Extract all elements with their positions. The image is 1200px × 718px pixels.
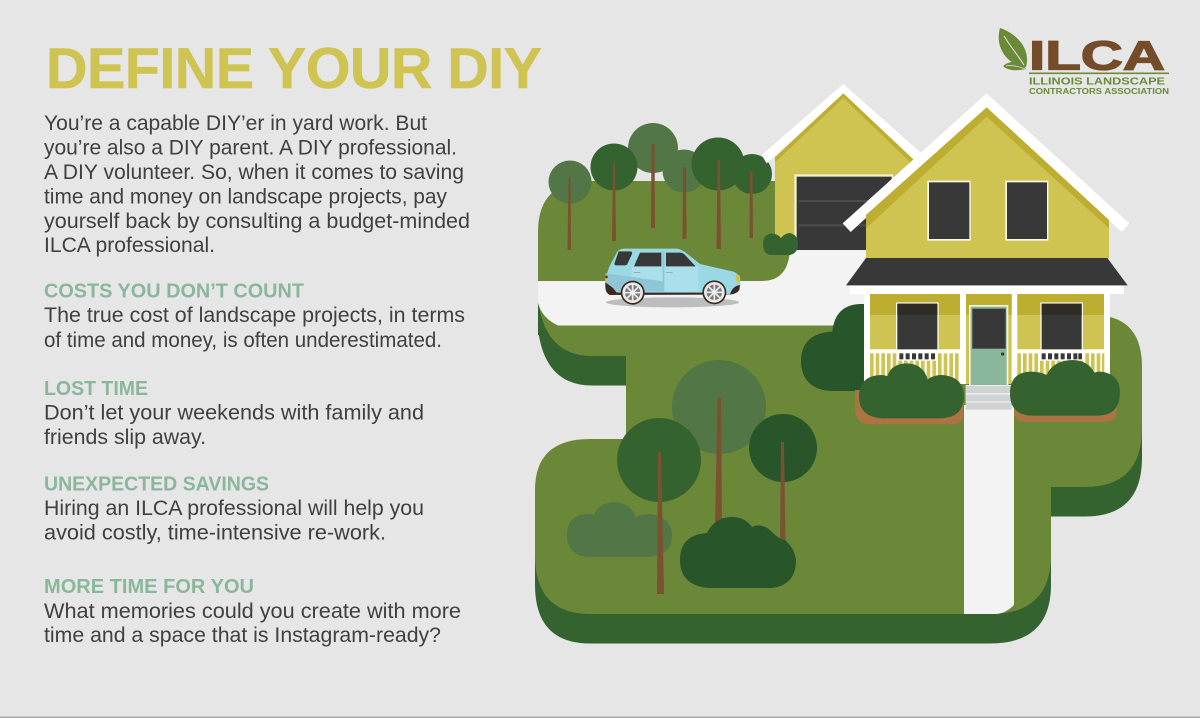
section: unexpected savings: Hiring an ILCA professional will help you (44, 497, 424, 520)
garage door (794, 174, 893, 250)
logo: ILCA: ILLINOIS LANDSCAPE (1029, 76, 1165, 88)
section: costs you don't count: The true cost of landscape projects, in terms (44, 304, 465, 327)
door (969, 305, 1008, 385)
back trees (548, 123, 772, 250)
planter left (855, 390, 963, 424)
upper storey (866, 107, 1109, 258)
lawn shadow (535, 300, 1142, 644)
section: unexpected savings: UNEXPECTED SAVINGS (44, 472, 269, 496)
intro paragraph: A DIY volunteer. So, when it comes to saving (44, 161, 464, 184)
section: lost time: Don’t let your weekends with family and (44, 402, 424, 424)
section: more time for you: MORE TIME FOR YOU (44, 575, 254, 598)
intro paragraph: time and money on landscape projects, pay (44, 186, 447, 208)
wheels (621, 280, 726, 305)
section: more time for you: time and a space that is Instagram-ready? (44, 624, 441, 647)
dark shrub behind porch (801, 304, 864, 391)
intro paragraph: ILCA professional. (44, 234, 215, 257)
steps (966, 385, 1012, 410)
section: lost time (44, 377, 424, 449)
section: lost time: friends slip away. (44, 426, 206, 449)
upper windows (927, 181, 971, 241)
section: costs you don't count: of time and money, is often underestimated. (44, 329, 442, 352)
main lawn (535, 300, 1142, 614)
illustration: yard and house (535, 84, 1142, 644)
intro paragraph: you’re also a DIY parent. A DIY professional. (44, 136, 457, 160)
logo: ILCA (999, 28, 1169, 96)
logo: ILCA: ILCA (1029, 32, 1165, 78)
section: unexpected savings: avoid costly, time-intensive re-work. (44, 522, 386, 544)
section: costs you don't count (44, 280, 465, 352)
shrub by garage (763, 233, 798, 255)
car (605, 249, 740, 307)
porch railings (870, 353, 1104, 384)
section: more time for you: What memories could you create with more (44, 600, 461, 623)
porch background (864, 294, 1110, 384)
garage (762, 84, 923, 250)
logo: ILCA: CONTRACTORS ASSOCIATION (1029, 86, 1169, 96)
section: lost time: LOST TIME (44, 377, 148, 400)
walkway (964, 405, 1014, 614)
section: costs you don't count: COSTS YOU DON’T COUNT (44, 280, 304, 302)
icon: leaves (999, 28, 1027, 70)
title: DEFINE YOUR DIY (46, 37, 542, 101)
intro paragraph: You’re a capable DIY’er in yard work. But (44, 112, 427, 135)
front trees and shrubs (567, 360, 817, 594)
planter right (1014, 400, 1117, 422)
bush right (1010, 360, 1120, 416)
upper lawn (538, 181, 790, 285)
main roof (843, 93, 1129, 232)
intro paragraph: yourself back by consulting a budget-minded (44, 210, 470, 233)
porch roof (846, 258, 1128, 285)
section: more time for you (44, 575, 461, 647)
house (801, 93, 1129, 424)
bush left (859, 363, 964, 418)
section: unexpected savings (44, 472, 424, 544)
intro paragraph (44, 112, 470, 257)
driveway (538, 250, 870, 326)
porch windows (896, 302, 939, 350)
